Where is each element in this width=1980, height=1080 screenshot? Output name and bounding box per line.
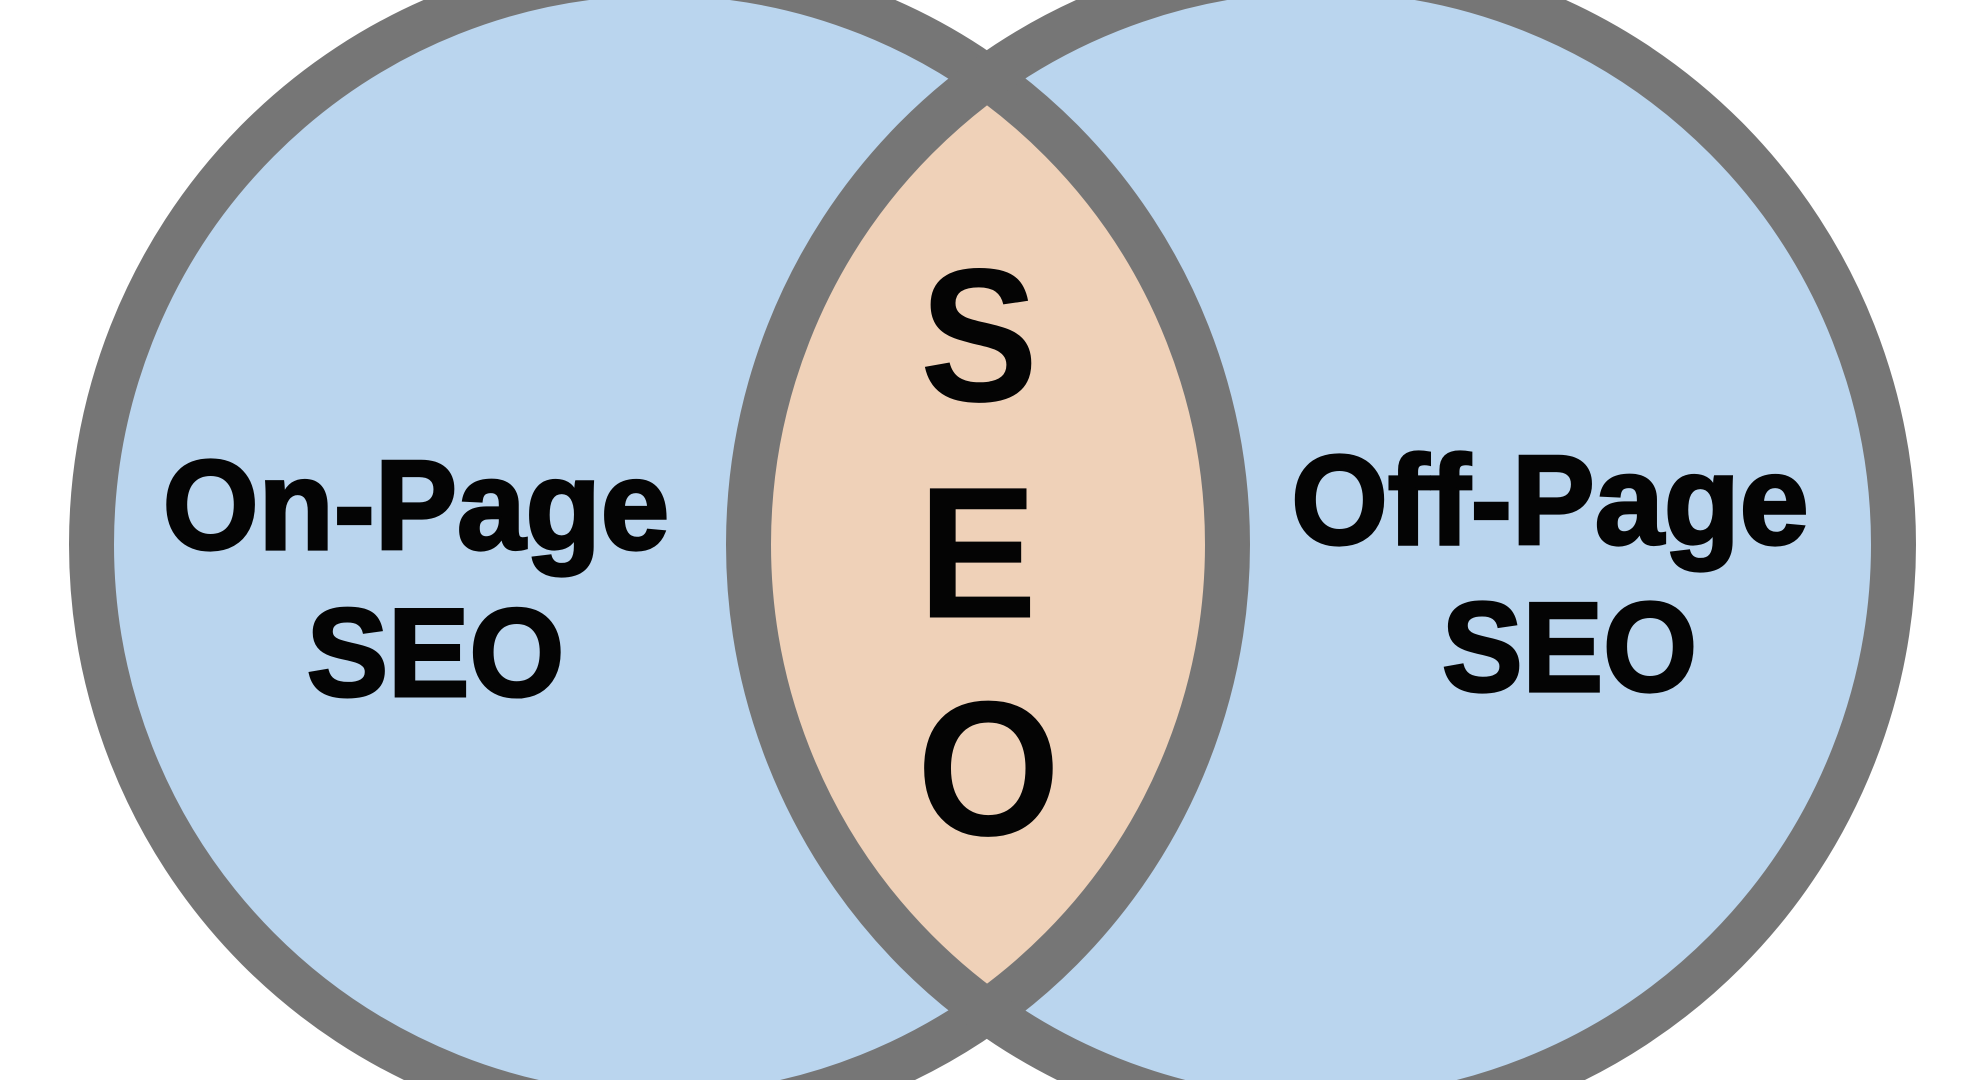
label: Off-Page SEO: SEO xyxy=(1442,577,1697,719)
label: On-Page SEO: SEO xyxy=(307,583,564,723)
label: vertical SEO in overlap: S xyxy=(920,229,1038,442)
label: Off-Page SEO xyxy=(1291,429,1809,719)
label: vertical SEO in overlap: E xyxy=(918,447,1037,657)
panel: left circle fill xyxy=(92,0,1228,1080)
left circle outline xyxy=(92,0,1228,1080)
panel: overlap lens xyxy=(771,106,1205,984)
label: On-Page SEO: On-Page xyxy=(163,434,669,576)
label: On-Page SEO xyxy=(163,434,669,723)
panel: right circle fill xyxy=(748,0,1894,1080)
label: Off-Page SEO: Off-Page xyxy=(1291,429,1809,571)
label: vertical SEO in overlap xyxy=(917,229,1060,876)
right circle outline xyxy=(748,0,1894,1080)
label: vertical SEO in overlap: O xyxy=(917,661,1060,876)
